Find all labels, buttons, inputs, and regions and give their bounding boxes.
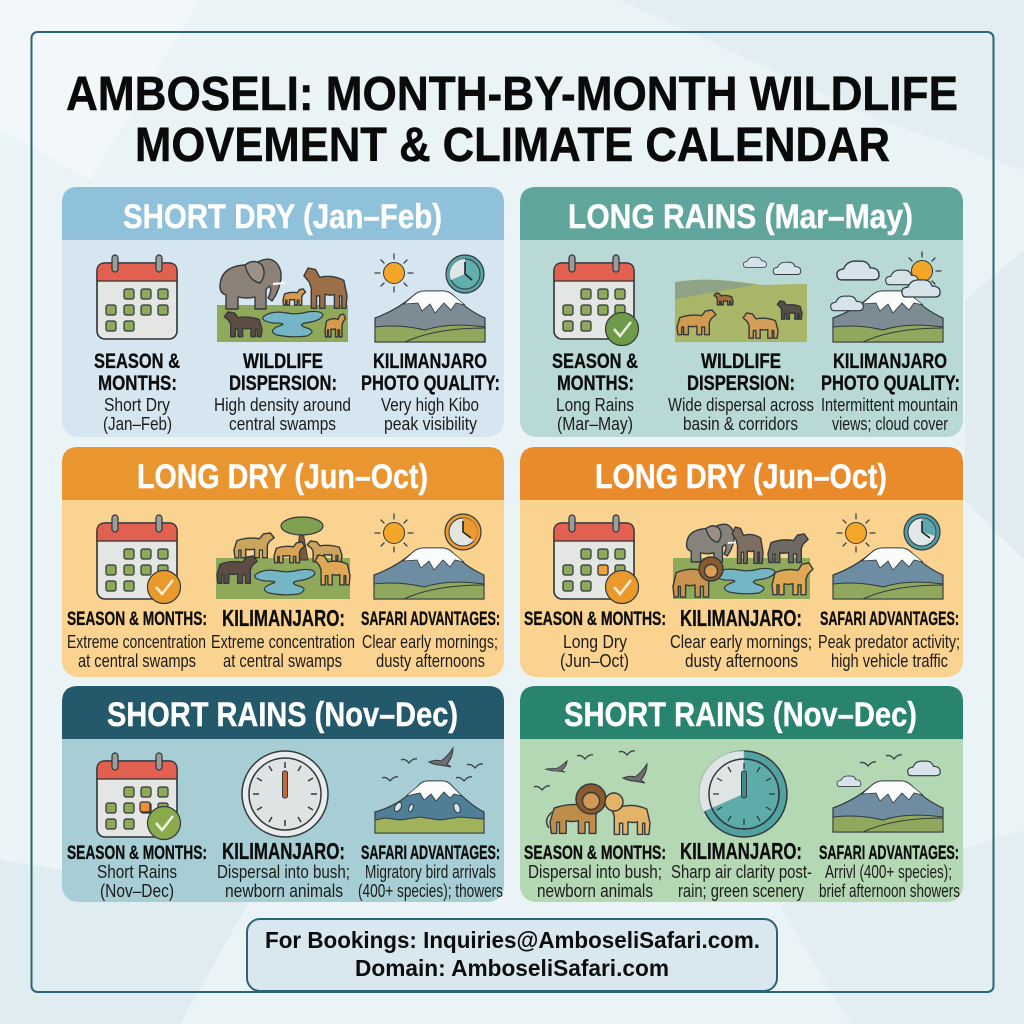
text: kilimanjaro photo quality: Intermittent mountain: [821, 394, 958, 415]
text: kilimanjaro: Dispersal into bush;: [217, 861, 350, 882]
text: season and months: Long Dry: [563, 631, 628, 652]
text: wildlife dispersion: central swamps: [229, 413, 336, 434]
heading: long dry: LONG DRY (Jun–Oct): [595, 458, 887, 496]
text: safari advantages: brief afternoon showers: [819, 880, 960, 901]
icon: mountain with clouds: [833, 755, 943, 832]
icon: calendar with check: [554, 255, 638, 346]
text: season and months: [67, 609, 207, 671]
text: season and months: Long Rains: [556, 394, 634, 415]
text: safari advantages: [818, 609, 960, 671]
icon: clock: [446, 255, 484, 293]
text: wildlife dispersion: WILDLIFE: [243, 350, 323, 373]
heading: short rains: SHORT RAINS (Nov–Dec): [107, 696, 458, 734]
text: season and months: Extreme concentration: [67, 631, 206, 652]
text: wildlife dispersion: DISPERSION:: [229, 372, 337, 395]
illustration: lions and birds: [534, 751, 650, 834]
title: MOVEMENT & CLIMATE CALENDAR: [135, 119, 890, 172]
text: season and months: SEASON & MONTHS:: [524, 843, 666, 864]
text: kilimanjaro photo quality: views; cloud cover: [832, 413, 948, 434]
text: season and months: newborn animals: [537, 880, 653, 901]
text: kilimanjaro: at central swamps: [223, 650, 342, 671]
text: season and months: (Mar–May): [557, 413, 633, 434]
icon: clock: [445, 514, 481, 550]
text: kilimanjaro photo quality: [821, 350, 960, 434]
panel: long dry left: [62, 447, 504, 677]
panel: short rains right: [520, 686, 963, 902]
text: kilimanjaro: newborn animals: [225, 880, 343, 901]
heading: short rains: SHORT RAINS (Nov–Dec): [564, 696, 917, 734]
illustration: wide dispersal: [675, 257, 807, 342]
text: season and months: [524, 843, 666, 901]
text: safari advantages: SAFARI ADVANTAGES:: [819, 843, 959, 864]
icon: clock: [242, 751, 328, 837]
text: kilimanjaro: Extreme concentration: [211, 631, 355, 652]
text: season and months: (Jan–Feb): [103, 413, 172, 434]
panel: short rains left: [62, 686, 504, 902]
text: season and months: at central swamps: [78, 650, 196, 671]
text: season and months: [524, 609, 666, 671]
illustration: animals at swamp with tree: [216, 517, 350, 599]
text: safari advantages: SAFARI ADVANTAGES:: [361, 609, 500, 630]
icon: mountain with birds: [375, 748, 484, 833]
text: season and months: MONTHS:: [98, 372, 177, 395]
icon: clock: [904, 514, 940, 550]
text: season and months: [552, 350, 638, 434]
icon: sun: [375, 514, 413, 552]
text: safari advantages: Migratory bird arrivals: [365, 861, 496, 882]
panel: long dry right: [520, 447, 963, 677]
text: safari advantages: (400+ species); thowers: [358, 880, 503, 901]
text: kilimanjaro: Clear early mornings;: [670, 631, 812, 652]
text: season and months: (Nov–Dec): [100, 880, 174, 901]
text: kilimanjaro: Sharp air clarity post-: [671, 861, 812, 882]
text: kilimanjaro: [671, 838, 812, 901]
text: kilimanjaro: KILIMANJARO:: [680, 605, 802, 631]
text: kilimanjaro photo quality: KILIMANJARO: [833, 350, 947, 373]
text: season and months: Dispersal into bush;: [528, 861, 662, 882]
icon: calendar with check: [554, 515, 638, 604]
icon: calendar: [97, 255, 177, 339]
text: kilimanjaro photo quality: Very high Kibo: [381, 394, 479, 415]
icon: mountain: [833, 548, 943, 599]
text: safari advantages: Clear early mornings;: [362, 631, 498, 652]
icon: sun: [375, 254, 413, 292]
icon: clock: [699, 751, 787, 837]
text: kilimanjaro: KILIMANJARO:: [680, 838, 802, 864]
heading: long rains: LONG RAINS (Mar–May): [568, 198, 913, 236]
text: season and months: MONTHS:: [557, 372, 634, 395]
text: season and months: SEASON & MONTHS:: [524, 609, 666, 630]
title: AMBOSELI: MONTH-BY-MONTH WILDLIFE: [66, 68, 958, 121]
text: season and months: Short Rains: [97, 861, 177, 882]
text: wildlife dispersion: [214, 350, 351, 434]
icon: clouds, sun and mountain: [831, 252, 943, 342]
text: season and months: SEASON & MONTHS:: [67, 609, 207, 630]
text: season and months: [94, 350, 180, 434]
text: kilimanjaro photo quality: PHOTO QUALITY:: [821, 372, 960, 395]
icon: mountain: [375, 291, 485, 342]
text: season and months: SEASON &: [94, 350, 180, 373]
text: season and months: (Jun–Oct): [560, 650, 629, 671]
callout: bookings: [247, 919, 777, 991]
text: safari advantages: high vehicle traffic: [831, 650, 948, 671]
illustration: wildlife around swamp: [217, 259, 348, 342]
icon: sun: [837, 514, 875, 552]
panel: short dry: [62, 187, 504, 437]
title: [66, 68, 958, 172]
panel: long rains: [520, 187, 963, 437]
text: wildlife dispersion: DISPERSION:: [687, 372, 795, 395]
text: kilimanjaro photo quality: peak visibility: [384, 413, 478, 434]
text: season and months: [67, 843, 207, 901]
callout: bookings: Domain: AmboseliSafari.com: [355, 955, 669, 981]
text: safari advantages: dusty afternoons: [376, 650, 485, 671]
text: safari advantages: Peak predator activity;: [818, 631, 960, 652]
text: kilimanjaro: KILIMANJARO:: [222, 838, 345, 864]
text: kilimanjaro photo quality: PHOTO QUALITY:: [361, 372, 500, 395]
text: safari advantages: [361, 609, 500, 671]
text: kilimanjaro photo quality: KILIMANJARO: [373, 350, 487, 373]
icon: calendar with check: [97, 753, 180, 840]
text: kilimanjaro photo quality: [361, 350, 500, 434]
text: safari advantages: SAFARI ADVANTAGES:: [361, 843, 500, 864]
text: kilimanjaro: dusty afternoons: [685, 650, 798, 671]
icon: calendar with check: [97, 515, 180, 604]
text: wildlife dispersion: High density around: [214, 394, 351, 415]
heading: short dry: SHORT DRY (Jan–Feb): [123, 198, 442, 236]
text: safari advantages: [819, 843, 960, 901]
text: kilimanjaro: rain; green scenery: [678, 880, 805, 901]
text: kilimanjaro: [670, 605, 812, 671]
text: wildlife dispersion: basin & corridors: [683, 413, 798, 434]
heading: long dry: LONG DRY (Jun–Oct): [137, 458, 428, 496]
text: season and months: Short Dry: [104, 394, 171, 415]
text: safari advantages: [358, 843, 503, 901]
text: kilimanjaro: [211, 605, 355, 671]
text: season and months: SEASON & MONTHS:: [67, 843, 207, 864]
text: kilimanjaro: KILIMANJARO:: [222, 605, 345, 631]
text: kilimanjaro: [217, 838, 350, 901]
illustration: predators at swamp: [673, 524, 813, 599]
text: safari advantages: Arrivl (400+ species);: [825, 861, 952, 882]
icon: mountain: [374, 548, 484, 599]
text: season and months: SEASON &: [552, 350, 638, 373]
text: wildlife dispersion: WILDLIFE: [701, 350, 781, 373]
text: wildlife dispersion: Wide dispersal across: [668, 394, 814, 415]
callout: bookings: For Bookings: Inquiries@AmboseliSafari.com.: [265, 927, 760, 953]
text: wildlife dispersion: [668, 350, 814, 434]
